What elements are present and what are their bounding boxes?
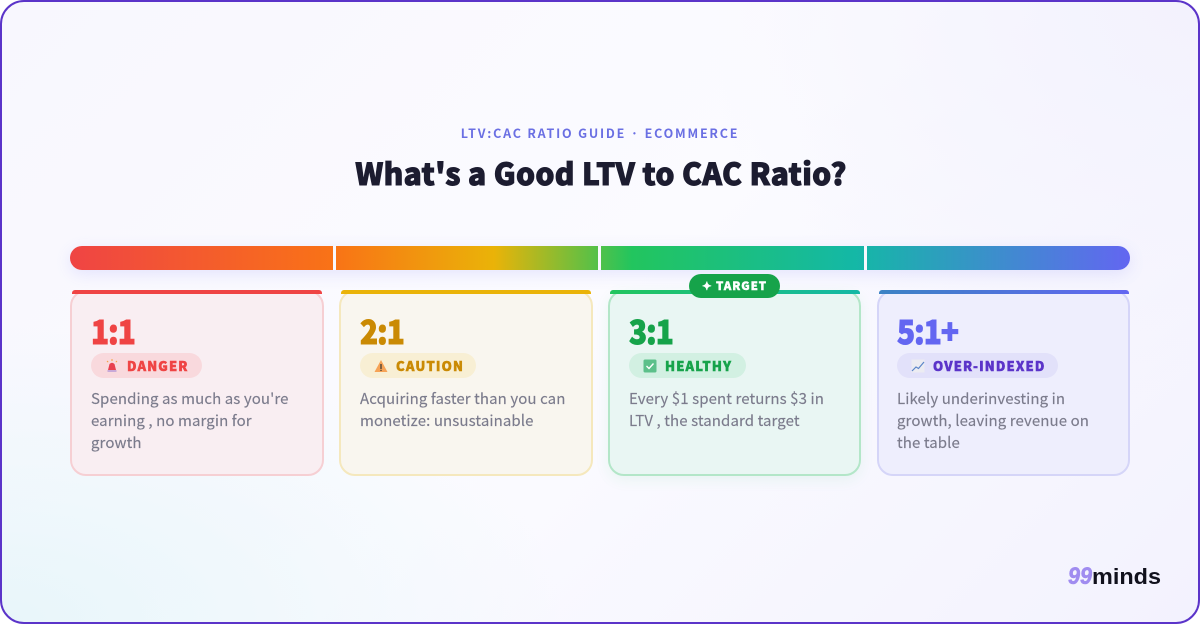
eyebrow label: LTV:CAC RATIO GUIDE · ECOMMERCE	[461, 123, 739, 142]
icon: siren	[106, 359, 118, 372]
badge: danger	[91, 353, 202, 378]
badge: healthy: HEALTHY	[665, 356, 732, 375]
title: What's a Good LTV to CAC Ratio?	[355, 150, 847, 194]
badge: danger: DANGER	[127, 356, 189, 375]
icon: warning	[374, 360, 388, 372]
badge: healthy	[629, 353, 746, 378]
panel: 2:1 caution	[339, 290, 593, 476]
ratio 2:1: 2:1	[360, 306, 404, 354]
description: Likely underinvesting in growth, leaving revenue on the table	[897, 388, 1089, 453]
target badge: ✦ TARGET	[702, 278, 767, 294]
accent bar: caution	[341, 290, 591, 294]
description: Acquiring faster than you can monetize: unsustainable	[360, 388, 565, 431]
accent bar: healthy	[610, 290, 860, 294]
icon: check box	[644, 360, 656, 372]
ratio 3:1: 3:1	[629, 306, 673, 354]
badge: over-indexed	[897, 353, 1058, 378]
ratio 5:1+: 5:1+	[897, 306, 958, 354]
badge: caution: CAUTION	[396, 356, 464, 375]
description: Every $1 spent returns $3 in LTV , the standard target	[629, 388, 824, 431]
panel: 3:1 healthy	[608, 290, 861, 476]
panel: 1:1 danger	[70, 290, 324, 476]
description: Spending as much as you're earning , no margin for growth	[91, 388, 289, 453]
target badge	[689, 274, 780, 298]
panel: 5:1+ over-indexed	[877, 290, 1130, 476]
badge: caution	[360, 353, 476, 378]
accent bar: danger	[72, 290, 322, 294]
badge: over-indexed: OVER-INDEXED	[933, 356, 1046, 375]
accent bar: over-indexed	[879, 290, 1129, 294]
ratio 1:1: 1:1	[91, 306, 135, 354]
logo: 99minds: minds	[1092, 564, 1161, 589]
logo: 99minds	[1068, 564, 1161, 590]
gradient scale bar	[70, 246, 1130, 270]
icon: chart	[912, 360, 924, 372]
